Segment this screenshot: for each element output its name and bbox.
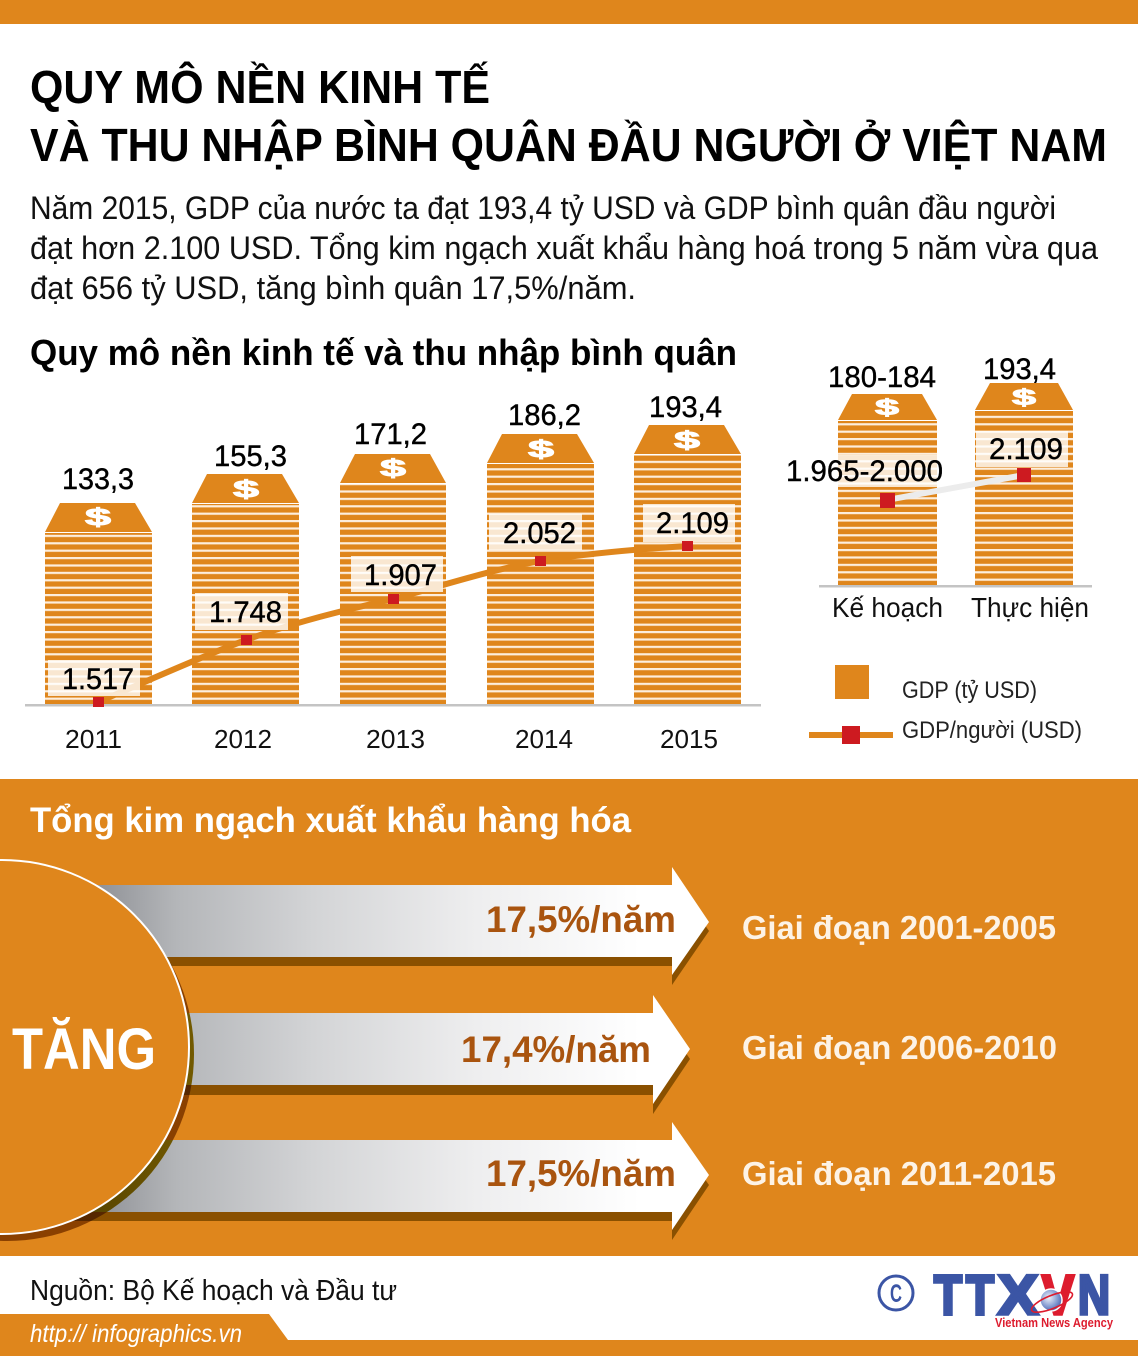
GDP value labels: 155,3 xyxy=(214,440,287,473)
markers xyxy=(880,468,1031,508)
values: 180-184 xyxy=(828,361,936,394)
GDP per capita values: 1.748 xyxy=(209,596,282,629)
GDP per capita label boxes xyxy=(48,504,735,696)
agency name: Vietnam News Agency xyxy=(995,1315,1114,1330)
label backgrounds xyxy=(838,431,1068,487)
period labels: Giai đoạn 2001-2005 xyxy=(742,909,1056,946)
connector line xyxy=(887,475,1024,500)
top bar xyxy=(0,0,1138,24)
globe xyxy=(1029,1288,1075,1316)
actual bar: $ xyxy=(1012,385,1036,410)
GDP per capita values xyxy=(62,507,729,696)
legend xyxy=(809,665,1082,744)
wordmark: T xyxy=(934,1263,962,1326)
year labels: 2015 xyxy=(660,724,718,754)
arrow 2011-2015 xyxy=(60,1122,709,1240)
arrow 2011-2015: 17,5%/năm xyxy=(486,1153,676,1194)
bar 2011: $ xyxy=(85,504,112,531)
footer bar xyxy=(0,1314,1138,1356)
GDP per capita values: 1.907 xyxy=(364,559,437,592)
category labels xyxy=(832,592,1089,623)
axis line xyxy=(25,704,761,706)
intro paragraph: Năm 2015, GDP của nước ta đạt 193,4 tỷ USD và GDP bình quân đầu người xyxy=(30,190,1056,226)
GDP value labels: 186,2 xyxy=(508,399,581,432)
category labels: Kế hoạch xyxy=(832,592,943,623)
GDP value labels: 193,4 xyxy=(649,391,722,424)
intro paragraph: đạt 656 tỷ USD, tăng bình quân 17,5%/năm. xyxy=(30,270,636,306)
values xyxy=(786,353,1063,488)
panel heading: Tổng kim ngạch xuất khẩu hàng hóa xyxy=(30,801,632,840)
circle: TĂNG xyxy=(0,860,194,1241)
arrow 2001-2005 xyxy=(60,867,709,985)
website url: http:// infographics.vn xyxy=(30,1320,242,1348)
bar 2015: $ xyxy=(674,427,701,454)
year labels xyxy=(65,724,718,754)
legend: GDP swatch xyxy=(835,665,1037,704)
period labels: Giai đoạn 2006-2010 xyxy=(742,1029,1057,1066)
bar 2014: $ xyxy=(528,436,555,463)
GDP value labels: 133,3 xyxy=(62,463,134,496)
period labels xyxy=(742,909,1057,1192)
GDP value labels: 171,2 xyxy=(354,418,427,451)
arrow 2006-2010: 17,4%/năm xyxy=(461,1029,651,1070)
bar 2015 xyxy=(634,425,741,705)
wordmark: X xyxy=(998,1263,1038,1326)
GDP per capita values: 2.052 xyxy=(503,517,576,550)
bar 2012: $ xyxy=(233,476,260,503)
wordmark: N xyxy=(1078,1263,1110,1326)
actual bar xyxy=(975,383,1073,586)
copyright icon xyxy=(879,1276,913,1310)
logo: TTXVN xyxy=(879,1263,1114,1330)
wordmark: T xyxy=(966,1263,994,1326)
legend: GDP per capita xyxy=(809,717,1082,744)
GDP value labels xyxy=(62,391,722,496)
category labels: Thực hiện xyxy=(971,592,1089,623)
wordmark xyxy=(934,1263,1110,1326)
values: 193,4 xyxy=(983,353,1056,386)
title xyxy=(30,61,1107,171)
intro paragraph: đạt hơn 2.100 USD. Tổng kim ngạch xuất khẩu hàng hoá trong 5 năm vừa qua xyxy=(30,230,1098,266)
axis line xyxy=(819,585,1092,588)
chart heading: Quy mô nền kinh tế và thu nhập bình quân xyxy=(30,332,737,373)
comparison chart: plan vs actual xyxy=(786,353,1092,623)
bar 2011 xyxy=(45,503,152,705)
bar 2013: $ xyxy=(380,455,407,482)
bar 2014 xyxy=(487,434,594,705)
bar chart: GDP 2011-2015 xyxy=(25,391,761,754)
legend: GDP swatch: GDP (tỷ USD) xyxy=(902,677,1037,704)
year labels: 2013 xyxy=(366,724,425,754)
circle: TĂNG: TĂNG xyxy=(12,1017,156,1082)
title: QUY MÔ NỀN KINH TẾ xyxy=(30,61,490,113)
intro paragraph xyxy=(30,190,1098,306)
GDP per capita values: 1.517 xyxy=(62,663,134,696)
year labels: 2012 xyxy=(214,724,272,754)
source: Nguồn: Bộ Kế hoạch và Đầu tư xyxy=(30,1275,397,1307)
values: 1.965-2.000 xyxy=(786,455,943,488)
wordmark: V xyxy=(1042,1263,1074,1326)
year labels: 2011 xyxy=(65,724,122,754)
bar 2013 xyxy=(340,454,446,705)
copyright icon: C xyxy=(890,1280,902,1308)
GDP per capita line xyxy=(98,546,688,702)
GDP per capita markers xyxy=(93,541,693,707)
values: 2.109 xyxy=(989,433,1063,466)
year labels: 2014 xyxy=(515,724,573,754)
legend: GDP per capita: GDP/người (USD) xyxy=(902,717,1082,744)
period labels: Giai đoạn 2011-2015 xyxy=(742,1155,1056,1192)
panel: export growth xyxy=(0,779,1138,1256)
plan bar: $ xyxy=(875,395,899,420)
bar 2012 xyxy=(192,474,299,705)
arrow 2001-2005: 17,5%/năm xyxy=(486,899,676,940)
plan bar xyxy=(838,394,937,586)
panel background xyxy=(0,779,1138,1256)
GDP per capita values: 2.109 xyxy=(656,507,729,540)
arrow 2006-2010 xyxy=(60,995,690,1114)
